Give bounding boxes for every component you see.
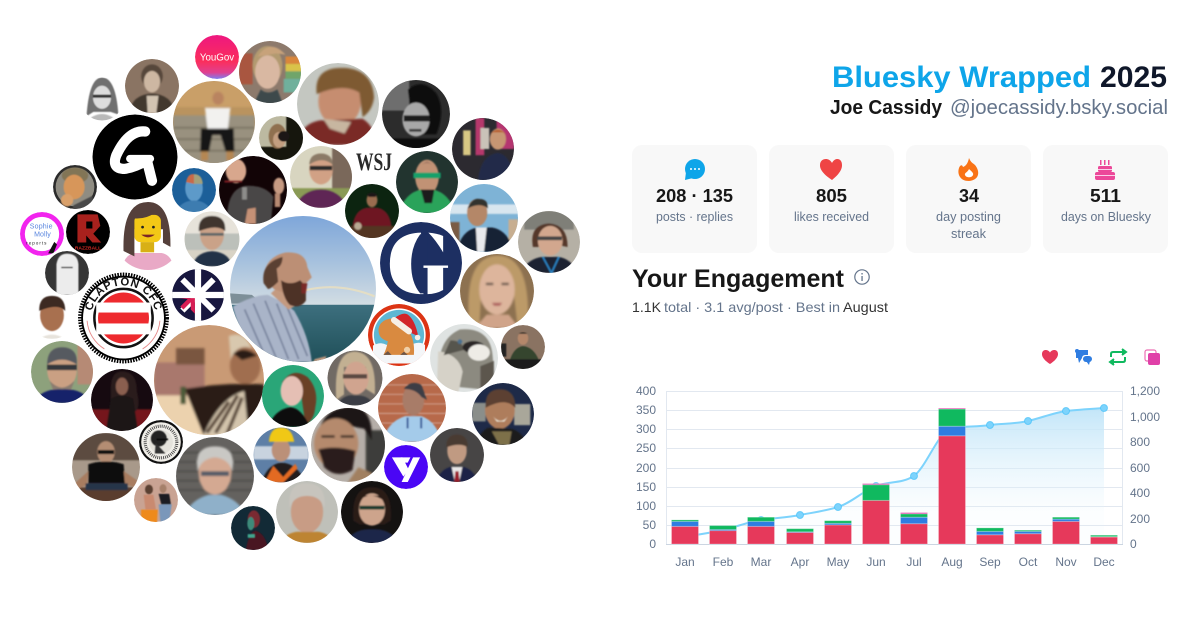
right axis labels: 200 bbox=[1130, 512, 1150, 526]
month labels: Feb bbox=[713, 555, 734, 569]
month labels: Aug bbox=[941, 555, 963, 569]
avatar: main profile man by the sea bbox=[230, 216, 376, 365]
right axis labels: 1,000 bbox=[1130, 410, 1160, 424]
avatar: capybara with santa hat bbox=[368, 304, 430, 366]
left axis labels: 400 bbox=[636, 384, 656, 398]
user name and handle: Joe Cassidy bbox=[830, 97, 943, 119]
month labels: Sep bbox=[979, 555, 1001, 569]
engagement summary: 1.1K bbox=[632, 299, 662, 315]
avatar: grey haired man in blue polo bbox=[176, 437, 254, 515]
icon: birthday cake bbox=[1095, 160, 1115, 180]
avatar: black and white woman with glasses bbox=[382, 80, 450, 149]
left axis labels: 0 bbox=[649, 537, 656, 551]
avatar: man by brick wall bbox=[378, 374, 446, 442]
stat card: likes received bbox=[769, 145, 894, 253]
right axis labels: 1,200 bbox=[1130, 384, 1160, 398]
avatar: curly haired man bbox=[297, 63, 379, 145]
stacked bars bbox=[672, 408, 1118, 544]
avatar: bespectacled man with burgundy shirt bbox=[290, 146, 353, 208]
avatar: white G on black bbox=[92, 114, 178, 200]
stat card: day posting streak bbox=[906, 145, 1031, 253]
stat card: days on Bluesky: days on Bluesky bbox=[1061, 209, 1151, 224]
stat card: day posting streak: streak bbox=[951, 226, 986, 241]
avatar: red-haired man in navy sweater bbox=[452, 118, 514, 180]
avatar: smiling woman with lanyard bbox=[518, 211, 580, 273]
avatar: Razzball R logo bbox=[66, 210, 110, 254]
right axis labels: 600 bbox=[1130, 461, 1150, 475]
left axis labels: 200 bbox=[636, 461, 656, 475]
icon: repost arrows bbox=[1110, 349, 1126, 365]
engagement summary bbox=[632, 299, 888, 315]
avatar: woman in black dress bbox=[91, 369, 153, 431]
avatar: blonde woman closeup bbox=[460, 254, 534, 328]
left axis labels: 250 bbox=[636, 441, 656, 455]
avatar: lego minifigure woman bbox=[123, 202, 172, 270]
avatar: man with green glasses and jacket bbox=[396, 151, 458, 213]
user name and handle bbox=[830, 97, 1168, 119]
right axis labels: 400 bbox=[1130, 486, 1150, 500]
avatar: sepia portrait woman bbox=[125, 59, 179, 113]
avatar: woman in red and teal light bbox=[231, 506, 275, 550]
avatar: man in hat reclining bbox=[154, 325, 264, 439]
engagement summary: August bbox=[843, 299, 888, 315]
left axis labels: 150 bbox=[636, 480, 656, 494]
stat card: posts and replies bbox=[632, 145, 757, 253]
avatar: Clapton CFC badge bbox=[78, 272, 169, 364]
stat card: days on Bluesky: 511 bbox=[1090, 186, 1121, 206]
right axis labels: 0 bbox=[1130, 537, 1137, 551]
stat card: likes received: 805 bbox=[816, 186, 847, 206]
user name and handle: @joecassidy.bsky.social bbox=[950, 97, 1168, 119]
icon: replies bubbles bbox=[1075, 349, 1092, 365]
avatar: two people with orange skirt bbox=[134, 478, 178, 524]
stat card: day posting streak: day posting bbox=[936, 209, 1001, 224]
stat card: likes received: likes received bbox=[794, 209, 869, 224]
month labels bbox=[675, 555, 1115, 569]
avatar: Sophie Molly reports logo: Molly bbox=[34, 232, 51, 239]
stat card: posts and replies: posts · replies bbox=[656, 209, 733, 224]
avatar: woman at table with floral top bbox=[501, 325, 545, 370]
avatar: drawn white figure on dark bbox=[45, 251, 89, 295]
avatar: man seated on stairs bbox=[173, 81, 255, 165]
avatar: Razzball R logo: RAZZBALL bbox=[75, 246, 101, 252]
avatar: smiling man in suit outdoors bbox=[450, 184, 518, 252]
cumulative area bbox=[685, 408, 1104, 544]
avatar: woman dark bob green glasses bbox=[341, 481, 403, 543]
cumulative line bbox=[685, 408, 1104, 537]
avatar: blue anatomical brain figure bbox=[172, 168, 216, 213]
icon: speech bubble bbox=[685, 159, 705, 180]
right axis labels bbox=[1130, 384, 1160, 551]
avatar: Sophie Molly reports logo: reports bbox=[26, 241, 47, 246]
title: 2025 bbox=[1100, 61, 1167, 94]
legend icons bbox=[1042, 349, 1160, 365]
combined chart: monthly engagement bars and cumulative line bbox=[636, 384, 1160, 569]
line points bbox=[720, 404, 1108, 534]
avatar: woman in dark with hand on face bbox=[259, 116, 303, 160]
icon: quote squares bbox=[1145, 350, 1160, 365]
title: Bluesky Wrapped bbox=[832, 61, 1091, 94]
avatar: woman with rainbow flag bbox=[239, 41, 304, 106]
month labels: Apr bbox=[791, 555, 809, 569]
avatar: Union flag style logo bbox=[172, 269, 224, 321]
icon: heart bbox=[820, 159, 842, 180]
avatar: Clapton CFC badge: CLAPTON CFC bbox=[85, 278, 162, 310]
icon: info bbox=[855, 270, 869, 284]
avatar: illustrated woman with glasses bbox=[86, 78, 119, 120]
avatar: smiling man city at night bbox=[472, 383, 534, 445]
month labels: Mar bbox=[751, 555, 771, 569]
avatar: man in suit red tie bbox=[430, 428, 484, 482]
month labels: May bbox=[827, 555, 849, 569]
month labels: Oct bbox=[1019, 555, 1038, 569]
left axis labels: 350 bbox=[636, 403, 656, 417]
avatar: YouGov logo bbox=[195, 35, 239, 79]
avatar: man in orange vest and yellow helmet bbox=[254, 428, 308, 482]
avatar: YouGov logo: YouGov bbox=[200, 53, 235, 64]
month labels: Jul bbox=[906, 555, 922, 569]
icon: flame bbox=[958, 158, 978, 181]
avatar: blonde woman with glasses bbox=[328, 350, 382, 406]
right axis labels: 800 bbox=[1130, 435, 1150, 449]
engagement summary: total · 3.1 avg/post · Best in bbox=[664, 299, 840, 315]
avatar: woman short hair leaning on hand bbox=[53, 165, 97, 213]
avatar: man with glasses by sea bbox=[184, 212, 240, 266]
icon: likes heart bbox=[1042, 350, 1058, 364]
logo: WSJ wordmark: WSJ bbox=[356, 149, 392, 176]
stat card: days on Bluesky bbox=[1043, 145, 1168, 253]
heading: Your Engagement: Your Engagement bbox=[632, 265, 845, 293]
stat card: day posting streak: 34 bbox=[959, 186, 979, 206]
left axis labels bbox=[636, 384, 656, 551]
stat card: posts and replies: 208 · 135 bbox=[656, 186, 733, 206]
avatar: grey haired man in mustard bbox=[276, 481, 338, 543]
avatar: young man portrait bbox=[38, 295, 66, 339]
left axis labels: 50 bbox=[643, 518, 656, 532]
avatar: Sophie Molly reports logo: Sophie bbox=[30, 223, 53, 230]
left axis labels: 100 bbox=[636, 499, 656, 513]
left axis labels: 300 bbox=[636, 422, 656, 436]
avatar: smiling man with glasses and beard bbox=[31, 341, 96, 403]
month labels: Nov bbox=[1055, 555, 1077, 569]
avatar: Sophie Molly reports logo bbox=[20, 212, 64, 256]
avatar: Vee logo on purple bbox=[384, 445, 428, 489]
month labels: Jun bbox=[866, 555, 886, 569]
avatar: man in dark red by skull bbox=[345, 184, 399, 239]
month labels: Dec bbox=[1093, 555, 1115, 569]
avatar: bald man with microphone bbox=[219, 156, 287, 224]
avatar: sunglasses man in black shirt bbox=[72, 433, 140, 504]
avatar: falcon closeup bbox=[430, 324, 498, 392]
avatar: bearded man closeup bbox=[311, 406, 388, 482]
avatar cluster bbox=[20, 35, 580, 550]
avatar: red-haired woman on green bbox=[262, 365, 324, 427]
month labels: Jan bbox=[675, 555, 695, 569]
avatar: round black and white stamp bbox=[139, 420, 183, 464]
avatar: Guardian G logo bbox=[380, 222, 462, 304]
